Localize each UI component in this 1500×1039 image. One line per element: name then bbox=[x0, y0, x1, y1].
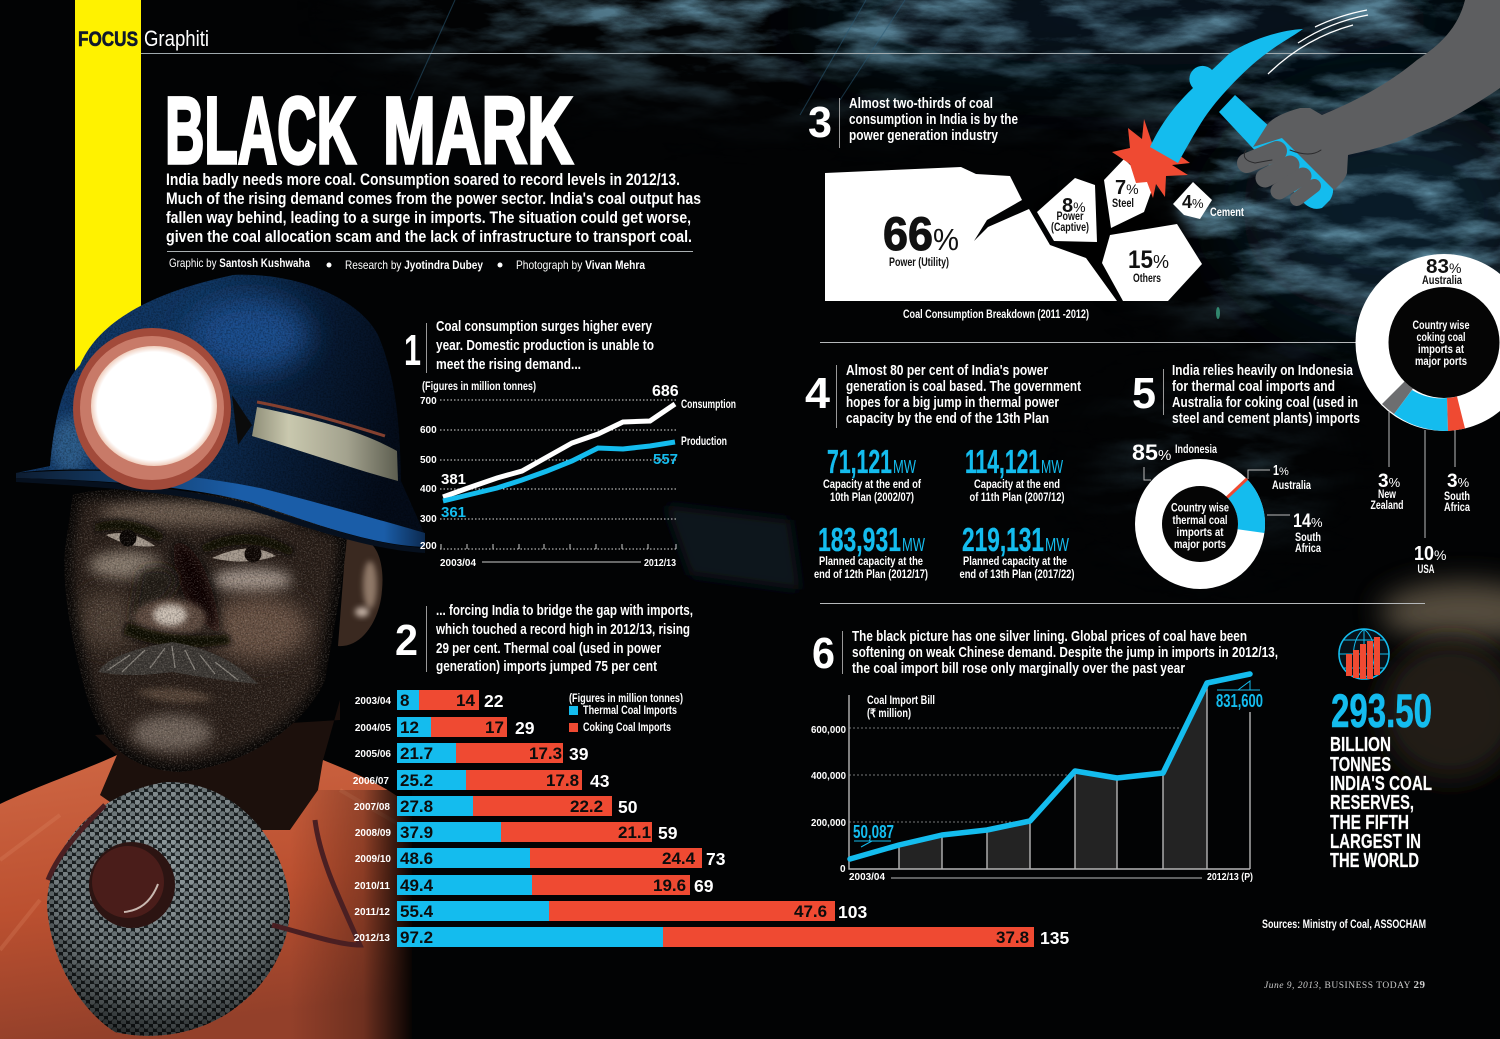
section 5 text: Australia for coking coal (used in bbox=[1172, 394, 1358, 411]
2005/06 bbox=[355, 743, 589, 764]
stat: coal reserves bbox=[1330, 684, 1432, 872]
thermal coal donut: 1 bbox=[1273, 462, 1279, 479]
coal piece: 4%: Cement bbox=[1210, 207, 1244, 219]
pick head bbox=[1150, 29, 1303, 163]
coal piece: 66%: % bbox=[933, 222, 959, 257]
stat: 219,131 MW: MW bbox=[1045, 535, 1069, 555]
sources: Sources: Ministry of Coal, ASSOCHAM bbox=[1262, 919, 1426, 931]
stat: coal reserves: LARGEST IN bbox=[1330, 831, 1421, 853]
helmet bbox=[16, 275, 425, 553]
line chart: 2012/13 bbox=[644, 558, 676, 569]
2012/13 bbox=[354, 927, 1069, 948]
coal piece: 4% bbox=[1173, 182, 1244, 219]
section 3 text bbox=[849, 95, 1018, 144]
area line chart: 0 bbox=[840, 864, 846, 875]
coking coal donut: coking coal bbox=[1416, 332, 1466, 344]
coking coal donut: 3% bbox=[1378, 471, 1401, 492]
coking coal donut: % bbox=[1434, 547, 1446, 563]
thermal coal donut: Africa bbox=[1295, 543, 1321, 555]
section 6 text bbox=[852, 628, 1278, 677]
legend: Thermal Coal Imports bbox=[583, 705, 677, 717]
section 4: capacity bbox=[805, 362, 1081, 581]
2003/04: 14 bbox=[456, 691, 475, 710]
section 2 text bbox=[435, 602, 693, 675]
area line chart: 400,000 bbox=[811, 771, 846, 782]
thermal coal donut bbox=[1132, 440, 1323, 589]
coking coal donut: New bbox=[1378, 489, 1396, 501]
area line chart: 50,087 bbox=[853, 822, 894, 842]
coal piece: 15%: 15 bbox=[1128, 246, 1153, 274]
miner photo illustration bbox=[0, 275, 425, 1039]
section 5 text: for thermal coal imports and bbox=[1172, 378, 1335, 395]
coking coal donut: major ports bbox=[1415, 356, 1467, 368]
area line chart: 200,000 bbox=[811, 818, 846, 829]
stat: 71,121 MW: 10th Plan (2002/07) bbox=[830, 492, 914, 504]
header: FOCUS Graphiti bbox=[78, 26, 1430, 54]
2003/04 bbox=[355, 690, 504, 711]
section 6 text: softening on weak Chinese demand. Despite the jump in imports in 2012/13, bbox=[852, 644, 1278, 661]
area line chart: (₹ million) bbox=[867, 708, 911, 720]
stat: coal reserves: INDIA'S COAL bbox=[1330, 773, 1432, 795]
2011/12 bbox=[354, 901, 867, 922]
thermal coal donut: imports at bbox=[1176, 527, 1224, 539]
intro text: India badly needs more coal. Consumption soared to record levels in 2012/13. bbox=[166, 171, 680, 189]
stat: 71,121 MW: MW bbox=[893, 457, 916, 477]
2008/09: 2008/09 bbox=[355, 828, 391, 839]
intro text: fallen way behind, leading to a surge in imports. The situation could get worse, bbox=[166, 209, 691, 227]
2006/07: 17.8 bbox=[546, 771, 579, 790]
legend: (Figures in million tonnes) bbox=[569, 693, 683, 705]
header: FOCUS Graphiti: FOCUS bbox=[78, 28, 138, 51]
coking coal donut: 83 bbox=[1426, 256, 1449, 278]
2010/11: 69 bbox=[694, 876, 714, 896]
thermal coal donut: Indonesia bbox=[1175, 444, 1217, 456]
credits: Photograph by Vivan Mehra bbox=[516, 258, 645, 272]
coal piece: 66%: 66 bbox=[883, 207, 933, 260]
stat: 71,121 MW: 71,121 bbox=[827, 443, 892, 480]
impact burst bbox=[1112, 119, 1190, 198]
2008/09: 59 bbox=[658, 823, 678, 843]
coal piece: 8%: (Captive) bbox=[1051, 222, 1089, 234]
section 5 text: steel and cement plants) imports bbox=[1172, 410, 1360, 427]
coking coal donut: 10 bbox=[1414, 543, 1434, 565]
coal piece: 15%: % bbox=[1153, 252, 1169, 272]
2006/07: 43 bbox=[590, 771, 610, 791]
stat: coal reserves: RESERVES, bbox=[1330, 792, 1414, 814]
number 1: 1 bbox=[404, 326, 421, 375]
section 4 text: generation is coal based. The government bbox=[846, 378, 1081, 395]
coal piece: 15%: Others bbox=[1133, 273, 1161, 285]
2003/04: 2003/04 bbox=[355, 696, 391, 707]
number 4: 4 bbox=[805, 369, 831, 418]
2007/08 bbox=[354, 796, 638, 817]
credits bbox=[169, 256, 645, 272]
speed lines bbox=[1268, 10, 1368, 74]
divider bbox=[820, 342, 1356, 343]
credits: Research by Jyotindra Dubey bbox=[345, 258, 483, 272]
number 5: 5 bbox=[1132, 369, 1156, 418]
stat: 219,131 MW bbox=[960, 521, 1075, 581]
stat: 183,931 MW: 183,931 bbox=[818, 521, 901, 558]
section 4 text bbox=[846, 362, 1081, 427]
thermal coal donut: thermal coal bbox=[1172, 515, 1228, 527]
pickaxe and hand illustration bbox=[1112, 0, 1500, 209]
2004/05: 2004/05 bbox=[355, 723, 391, 734]
coking coal donut: USA bbox=[1418, 564, 1434, 576]
2010/11: 19.6 bbox=[653, 876, 686, 895]
2004/05: 29 bbox=[515, 718, 535, 738]
section 3 text: power generation industry bbox=[849, 127, 999, 144]
2005/06: 2005/06 bbox=[355, 749, 391, 760]
area line chart: Coal Import Bill bbox=[867, 695, 935, 707]
section 2 text: ... forcing India to bridge the gap with imports, bbox=[436, 602, 693, 619]
area line chart bbox=[811, 674, 1263, 883]
area line chart: 600,000 bbox=[811, 725, 846, 736]
line chart: 557 bbox=[653, 451, 678, 468]
thermal coal donut: major ports bbox=[1174, 539, 1226, 551]
thermal coal donut: 85 bbox=[1132, 440, 1158, 465]
ear bbox=[338, 538, 383, 646]
stat: 114,121 MW bbox=[965, 443, 1065, 504]
stat: 219,131 MW: Planned capacity at the bbox=[963, 556, 1067, 568]
respirator mask bbox=[47, 782, 360, 1036]
stat: 114,121 MW: MW bbox=[1041, 457, 1063, 477]
stat: coal reserves: THE WORLD bbox=[1330, 850, 1419, 872]
moustache bbox=[98, 642, 258, 684]
stat: coal reserves: 293.50 bbox=[1331, 684, 1432, 737]
2007/08: 50 bbox=[618, 797, 638, 817]
stat: coal reserves: BILLION bbox=[1330, 734, 1391, 756]
2007/08: 2007/08 bbox=[354, 802, 390, 813]
line chart: 600 bbox=[420, 425, 437, 436]
coking coal donut: % bbox=[1449, 260, 1461, 276]
coal piece: 15% bbox=[1102, 224, 1202, 301]
header: FOCUS Graphiti: Graphiti bbox=[144, 26, 209, 51]
2012/13: 2012/13 bbox=[354, 933, 390, 944]
stat: coal reserves: TONNES bbox=[1330, 754, 1391, 776]
stat: 183,931 MW: MW bbox=[902, 535, 925, 555]
dark mine background bbox=[352, 0, 1500, 792]
2004/05 bbox=[355, 717, 535, 738]
legend: Coking Coal Imports bbox=[583, 722, 671, 734]
section 5 text: India relies heavily on Indonesia bbox=[1172, 362, 1354, 379]
section 5: country-wise imports bbox=[1132, 254, 1500, 589]
section 6 text: The black picture has one silver lining. Global prices of coal have been bbox=[852, 628, 1247, 645]
area line chart: 831,600 bbox=[1216, 691, 1263, 711]
coal piece: 7%: 7% bbox=[1115, 177, 1139, 199]
coal piece: 7%: Steel bbox=[1112, 198, 1134, 210]
section 2 text: 29 per cent. Thermal coal (used in power bbox=[436, 640, 661, 657]
2006/07: 2006/07 bbox=[353, 776, 389, 787]
intro text bbox=[166, 171, 701, 246]
coking coal donut: Africa bbox=[1444, 502, 1470, 514]
coking coal donut: Australia bbox=[1422, 275, 1462, 287]
stat: 219,131 MW: 219,131 bbox=[962, 521, 1044, 558]
2005/06: 21.7 bbox=[400, 744, 433, 763]
stat: 219,131 MW: end of 13th Plan (2017/22) bbox=[960, 569, 1075, 581]
area line chart: 2003/04 bbox=[849, 872, 885, 883]
line chart: 2003/04 bbox=[440, 558, 476, 569]
legend bbox=[569, 693, 683, 734]
section 1: consumption vs production bbox=[404, 318, 736, 569]
yellow band bbox=[75, 0, 141, 375]
2011/12: 2011/12 bbox=[354, 907, 390, 918]
line chart: 700 bbox=[420, 396, 437, 407]
2011/12: 103 bbox=[838, 902, 867, 922]
section 1 text: meet the rising demand... bbox=[436, 356, 581, 373]
stat: 183,931 MW bbox=[814, 521, 928, 581]
2006/07: 25.2 bbox=[400, 771, 433, 790]
section 3: consumption breakdown: Coal Consumption Breakdown (2011 -2012) bbox=[903, 309, 1089, 321]
2007/08: 27.8 bbox=[400, 797, 433, 816]
section 4 text: Almost 80 per cent of India's power bbox=[846, 362, 1048, 379]
title: MARK bbox=[383, 78, 573, 184]
stat: 71,121 MW: Capacity at the end of bbox=[823, 479, 921, 491]
2010/11: 2010/11 bbox=[354, 881, 390, 892]
line chart: 500 bbox=[420, 455, 437, 466]
2003/04: 8 bbox=[400, 691, 409, 710]
page footer: June 9, 2013, BUSINESS TODAY 29 bbox=[1264, 979, 1426, 991]
neck bbox=[95, 700, 340, 830]
line chart: 300 bbox=[420, 514, 437, 525]
line chart: Production bbox=[681, 436, 727, 448]
section 6 text: the coal import bill rose only marginally over the past year bbox=[852, 660, 1185, 677]
2004/05: 17 bbox=[485, 718, 504, 737]
line chart bbox=[420, 381, 736, 569]
section 1 text: Coal consumption surges higher every bbox=[436, 318, 653, 335]
pick handle bbox=[1219, 95, 1333, 209]
section 6: coal import bill bbox=[811, 628, 1278, 883]
coking coal donut: South bbox=[1444, 491, 1470, 503]
section 3: consumption breakdown bbox=[808, 95, 1244, 321]
section 1 text: year. Domestic production is unable to bbox=[436, 337, 654, 354]
coking coal donut: 3% bbox=[1447, 471, 1470, 492]
left eye bbox=[106, 533, 155, 547]
thermal coal donut: South bbox=[1295, 532, 1321, 544]
right eye bbox=[212, 548, 276, 562]
line chart: 200 bbox=[420, 541, 437, 552]
stat: 71,121 MW bbox=[823, 443, 921, 504]
divider bbox=[820, 603, 1425, 604]
coking coal donut bbox=[1356, 254, 1500, 576]
2009/10 bbox=[355, 848, 726, 869]
line chart: 400 bbox=[420, 484, 437, 495]
2011/12: 55.4 bbox=[400, 902, 434, 921]
2007/08: 22.2 bbox=[570, 797, 603, 816]
line chart: 381 bbox=[441, 471, 466, 488]
thermal coal donut: % bbox=[1279, 466, 1289, 478]
line chart: (Figures in million tonnes) bbox=[422, 381, 536, 393]
2012/13: 37.8 bbox=[996, 928, 1029, 947]
section 5 text bbox=[1172, 362, 1360, 427]
thermal coal donut: % bbox=[1311, 515, 1323, 530]
2004/05: 12 bbox=[400, 718, 419, 737]
2012/13: 135 bbox=[1040, 928, 1069, 948]
section 3 text: consumption in India is by the bbox=[849, 111, 1018, 128]
2008/09: 37.9 bbox=[400, 823, 433, 842]
face bbox=[60, 484, 360, 774]
line chart: 361 bbox=[441, 504, 466, 521]
thermal coal donut: Australia bbox=[1272, 480, 1311, 492]
2009/10: 73 bbox=[706, 849, 726, 869]
coal piece: 66% bbox=[825, 167, 1117, 301]
2006/07 bbox=[353, 770, 610, 791]
stat: 114,121 MW: 114,121 bbox=[965, 443, 1040, 480]
credits: Graphic by Santosh Kushwaha bbox=[169, 256, 310, 270]
2012/13: 97.2 bbox=[400, 928, 433, 947]
stat: 183,931 MW: end of 12th Plan (2012/17) bbox=[814, 569, 928, 581]
section 3 text: Almost two-thirds of coal bbox=[849, 95, 993, 112]
2005/06: 39 bbox=[569, 744, 589, 764]
coal piece: 66%: Power (Utility) bbox=[889, 257, 949, 269]
2008/09: 21.1 bbox=[618, 823, 651, 842]
coking coal donut: imports at bbox=[1418, 344, 1464, 356]
stat: 114,121 MW: of 11th Plan (2007/12) bbox=[970, 492, 1065, 504]
area line chart: 2012/13 (P) bbox=[1207, 872, 1253, 883]
line chart: Consumption bbox=[681, 399, 736, 411]
thermal coal donut: Country wise bbox=[1171, 502, 1229, 514]
thermal coal donut: % bbox=[1158, 447, 1171, 464]
section 4 text: capacity by the end of the 13th Plan bbox=[846, 410, 1049, 427]
2009/10: 2009/10 bbox=[355, 854, 391, 865]
dark backing behind coal pieces bbox=[1030, 170, 1190, 300]
section 2 text: generation) imports jumped 75 per cent bbox=[436, 658, 657, 675]
head lamp bbox=[73, 328, 252, 490]
coking coal donut: Zealand bbox=[1370, 500, 1404, 512]
2011/12: 47.6 bbox=[794, 902, 827, 921]
2003/04: 22 bbox=[484, 691, 504, 711]
2010/11: 49.4 bbox=[400, 876, 434, 895]
2010/11 bbox=[354, 875, 714, 896]
title: BLACK bbox=[165, 78, 356, 184]
thermal coal donut: 14 bbox=[1293, 511, 1311, 532]
stat: 114,121 MW: Capacity at the end bbox=[974, 479, 1060, 491]
2009/10: 48.6 bbox=[400, 849, 433, 868]
stat: 183,931 MW: Planned capacity at the bbox=[819, 556, 923, 568]
number 3: 3 bbox=[808, 98, 832, 147]
gripping fingers bbox=[1244, 150, 1321, 199]
shirt bbox=[0, 755, 412, 1039]
number 6: 6 bbox=[812, 629, 835, 678]
stacked bar chart bbox=[353, 690, 1069, 948]
stat: coal reserves: THE FIFTH bbox=[1330, 812, 1409, 834]
coal piece: 8%: Power bbox=[1056, 211, 1084, 223]
coal piece: 8%: 8% bbox=[1062, 195, 1086, 217]
arm bbox=[1253, 0, 1500, 190]
number 2: 2 bbox=[395, 616, 418, 665]
coking coal donut: Country wise bbox=[1412, 320, 1470, 332]
coal piece: 4%: 4% bbox=[1182, 192, 1204, 212]
section 1 text bbox=[436, 318, 654, 373]
2005/06: 17.3 bbox=[529, 744, 562, 763]
2009/10: 24.4 bbox=[662, 849, 696, 868]
coal piece: 8% bbox=[1037, 178, 1097, 242]
intro text: Much of the rising demand comes from the power sector. India's coal output has bbox=[166, 190, 701, 208]
intro text: given the coal allocation scam and the lack of infrastructure to transport coal. bbox=[166, 228, 692, 246]
2008/09 bbox=[355, 822, 678, 843]
section 2 text: which touched a record high in 2012/13, rising bbox=[435, 621, 690, 638]
section 4 text: hopes for a big jump in thermal power bbox=[846, 394, 1059, 411]
section 2: imports bbox=[353, 602, 1069, 948]
icon: globe with bars bbox=[1339, 629, 1389, 679]
coal piece: 7% bbox=[1104, 159, 1153, 228]
line chart: 686 bbox=[652, 383, 679, 400]
